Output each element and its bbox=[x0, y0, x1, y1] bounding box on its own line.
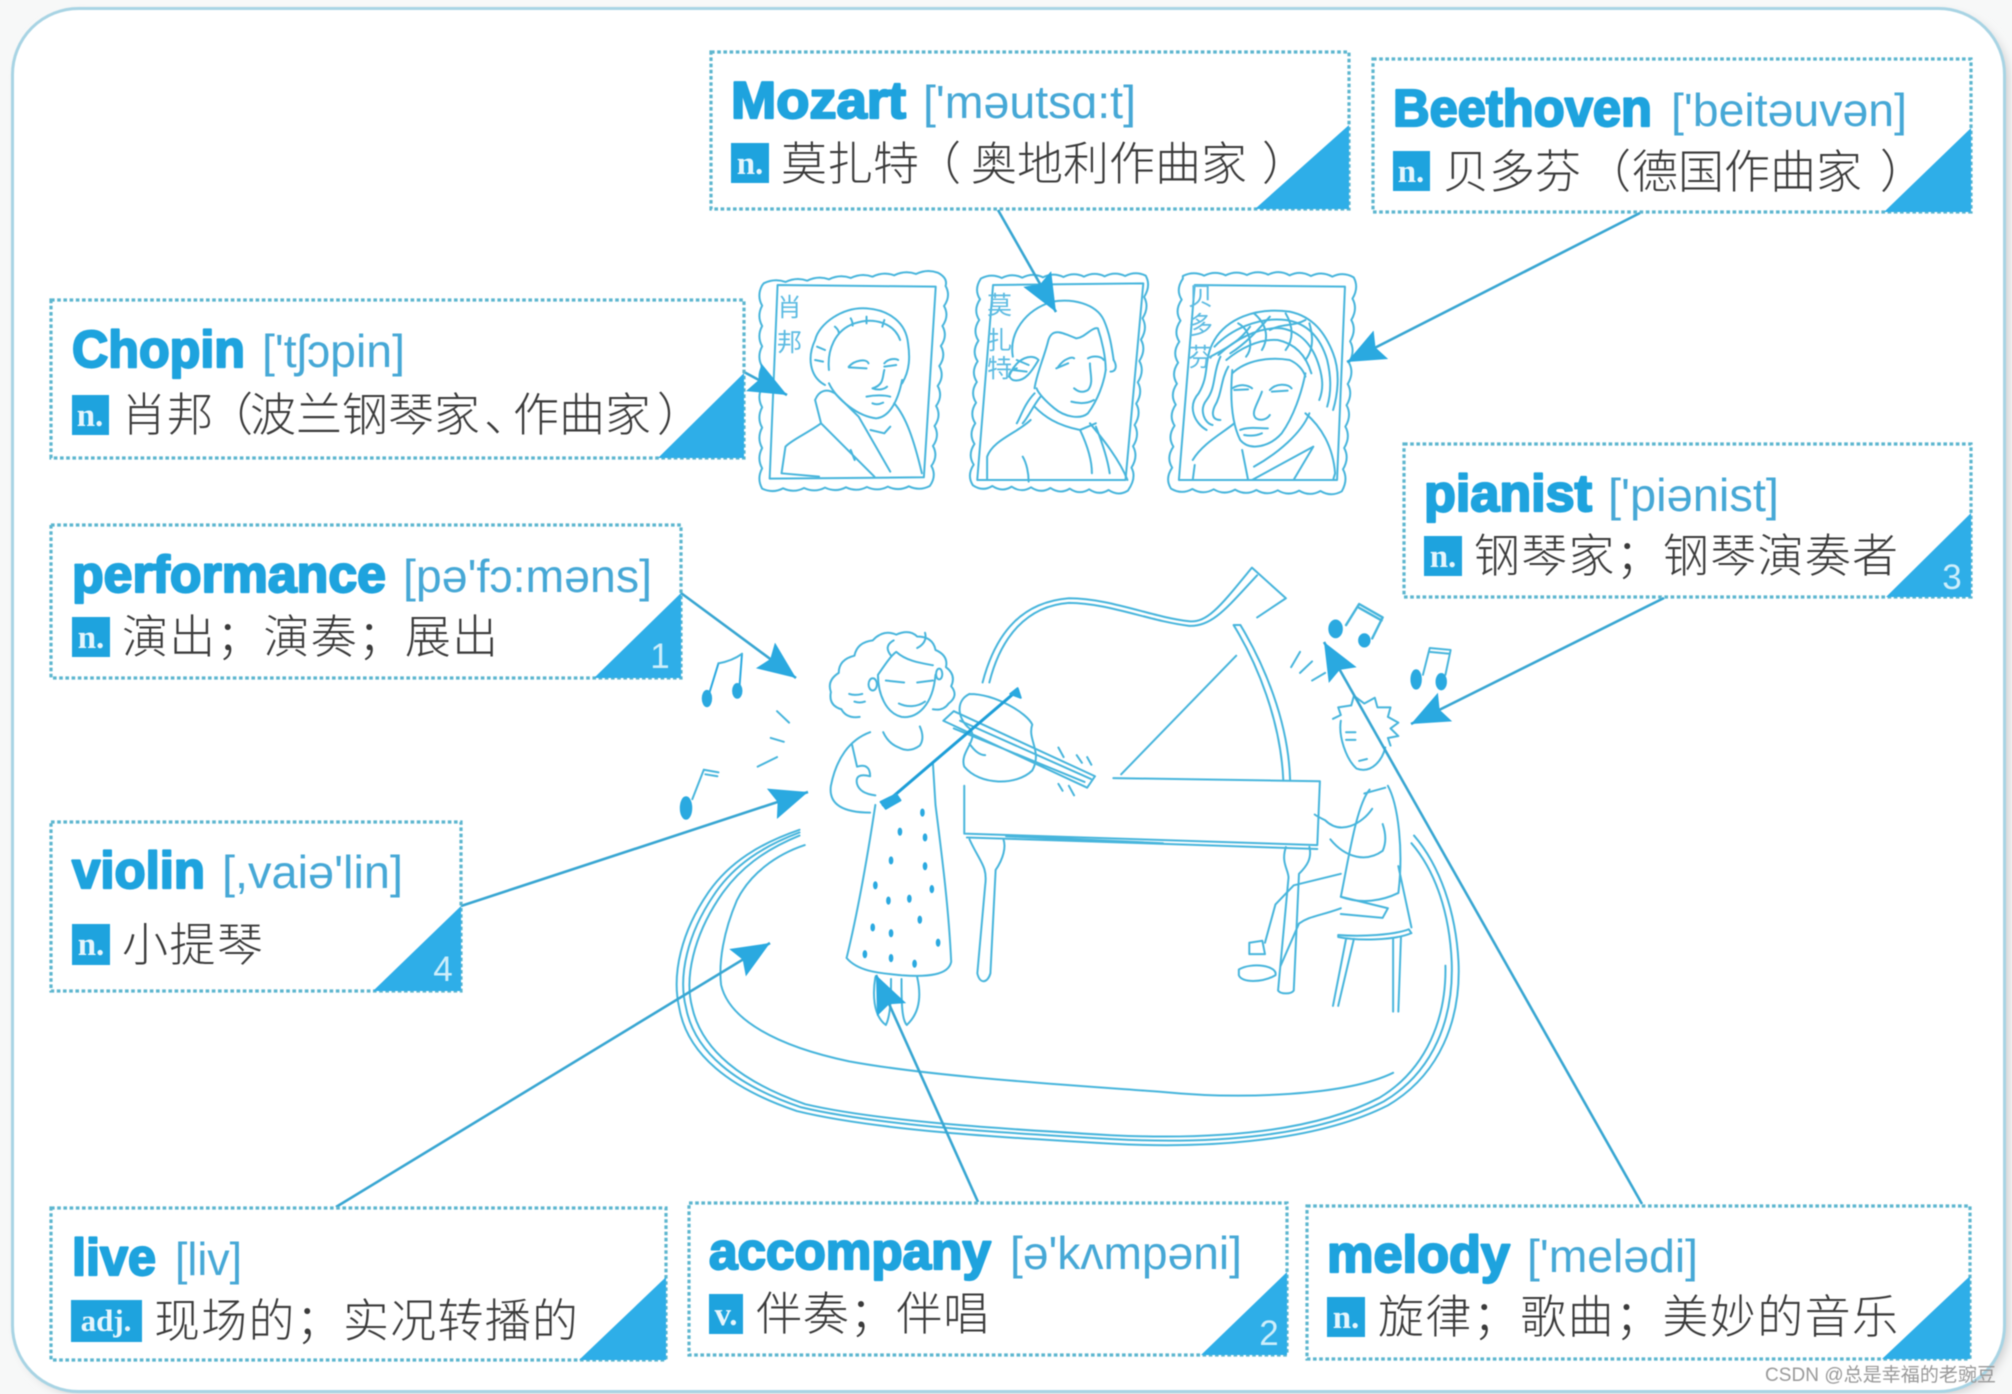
panel: Mozart: n. bbox=[737, 146, 763, 182]
panel: performance: n. bbox=[78, 620, 104, 656]
panel: Chopin: 肖邦 bbox=[121, 379, 213, 445]
watermark: CSDN @总是幸福的老豌豆 bbox=[1765, 1364, 1996, 1386]
panel: live: 现场的；实况转播的 bbox=[154, 1285, 578, 1351]
panel: Mozart: ['məutsɑ:t] bbox=[923, 76, 1136, 128]
panel: accompany: accompany bbox=[709, 1223, 991, 1281]
stamp captions: 莫 bbox=[987, 286, 1012, 322]
panel: performance: 1 bbox=[650, 637, 670, 676]
stamp captions: 扎 bbox=[987, 321, 1012, 357]
panel: performance: [pə'fɔ:məns] bbox=[403, 550, 652, 602]
panel: melody: n. bbox=[1333, 1300, 1359, 1336]
panel: Mozart: 莫扎特 bbox=[781, 128, 919, 194]
stamp: Mozart portrait bbox=[970, 273, 1148, 493]
panel: Mozart: ） bbox=[1262, 128, 1308, 194]
grand piano bbox=[964, 568, 1320, 993]
stamp: Chopin portrait bbox=[759, 271, 948, 491]
panel: Beethoven: 德国作曲家 bbox=[1632, 136, 1862, 202]
panel: live: live bbox=[72, 1229, 156, 1287]
panel: Mozart bbox=[711, 52, 1349, 209]
panel: Beethoven: Beethoven bbox=[1393, 80, 1652, 138]
arrow: melody bbox=[1324, 642, 1642, 1204]
panel: performance: 演出；演奏；展出 bbox=[122, 601, 498, 667]
panel: Chopin: n. bbox=[77, 398, 103, 434]
panel: violin: violin bbox=[72, 842, 205, 900]
panel: violin: 小提琴 bbox=[122, 909, 263, 975]
panel: performance bbox=[51, 525, 681, 678]
panel: Chopin: （ bbox=[207, 379, 253, 445]
panel: Mozart: Mozart bbox=[731, 72, 906, 130]
panel: accompany: v. bbox=[715, 1297, 737, 1333]
panel: performance: performance bbox=[72, 546, 386, 604]
panel: pianist: n. bbox=[1430, 539, 1456, 575]
arrow: pianist bbox=[1411, 598, 1664, 724]
panel: violin bbox=[51, 822, 461, 991]
music notes and sound marks bbox=[681, 604, 1451, 819]
panel: pianist: ['piənist] bbox=[1608, 469, 1779, 521]
panel: melody: melody bbox=[1327, 1226, 1510, 1284]
pianist bbox=[1239, 696, 1411, 1012]
panel: Beethoven: （ bbox=[1585, 136, 1631, 202]
panel: pianist bbox=[1404, 444, 1971, 597]
panel: melody: ['melədi] bbox=[1527, 1230, 1698, 1282]
panel: Beethoven: 贝多芬 bbox=[1443, 136, 1581, 202]
panel: Mozart: （ bbox=[915, 128, 961, 194]
panel: Beethoven: ['beitəuvən] bbox=[1671, 84, 1907, 136]
stamp captions: 肖 bbox=[777, 288, 802, 324]
panel: Chopin bbox=[51, 300, 744, 458]
violinist bbox=[830, 632, 955, 1025]
panel: melody bbox=[1307, 1206, 1970, 1359]
arrow: accompany bbox=[876, 975, 978, 1202]
illustration: three composer stamps bbox=[759, 271, 1356, 494]
panel: accompany bbox=[689, 1203, 1287, 1355]
panel: Beethoven: ） bbox=[1880, 136, 1926, 202]
panel: accompany: [ə'kʌmpəni] bbox=[1010, 1227, 1242, 1279]
stamp captions: 芬 bbox=[1188, 338, 1213, 374]
panel: violin: [,vaiə'lin] bbox=[222, 846, 403, 898]
panel: violin: n. bbox=[78, 927, 104, 963]
arrow: Mozart to portrait bbox=[998, 210, 1056, 312]
panel: violin: 4 bbox=[433, 950, 453, 989]
arrow: Chopin to portrait bbox=[744, 372, 787, 395]
panel: Mozart: 奥地利作曲家 bbox=[971, 128, 1247, 194]
panel: pianist: 钢琴家；钢琴演奏者 bbox=[1474, 520, 1898, 586]
panel: accompany: 伴奏；伴唱 bbox=[756, 1278, 989, 1344]
illustration: violinist and pianist on stage bbox=[677, 568, 1459, 1145]
panel: live: [liv] bbox=[175, 1233, 242, 1285]
panel: Chopin: Chopin bbox=[72, 321, 245, 379]
arrow: Beethoven to portrait bbox=[1347, 213, 1640, 362]
stamp captions: 多 bbox=[1188, 306, 1213, 342]
panel: Chopin: 波兰钢琴家 bbox=[250, 379, 480, 445]
panel: live bbox=[51, 1208, 666, 1360]
panel: Chopin: ['tʃɔpin] bbox=[262, 325, 405, 377]
stage outline bbox=[677, 830, 1459, 1145]
panel: pianist: pianist bbox=[1424, 465, 1592, 523]
arrow: performance bbox=[681, 593, 796, 678]
panel: Chopin: 作曲家 bbox=[513, 379, 651, 445]
stamp: Beethoven portrait bbox=[1168, 272, 1356, 494]
panel: accompany: 2 bbox=[1259, 1314, 1279, 1353]
panel: melody: 旋律；歌曲；美妙的音乐 bbox=[1378, 1281, 1898, 1347]
stamp captions: 贝 bbox=[1188, 277, 1213, 313]
arrow: violin bbox=[461, 792, 808, 906]
stamp captions: 特 bbox=[987, 349, 1012, 385]
panel: Chopin: ） bbox=[657, 379, 703, 445]
arrow: live bbox=[336, 943, 770, 1207]
stamp captions bbox=[777, 277, 1213, 385]
violin and bow bbox=[881, 688, 1095, 809]
panel: Chopin: 、 bbox=[484, 379, 530, 445]
stamp captions: 邦 bbox=[777, 323, 802, 359]
panel: Beethoven bbox=[1373, 59, 1971, 212]
panel: live: adj. bbox=[81, 1303, 131, 1338]
panel: pianist: 3 bbox=[1942, 558, 1962, 597]
panel: Beethoven: n. bbox=[1398, 154, 1424, 190]
